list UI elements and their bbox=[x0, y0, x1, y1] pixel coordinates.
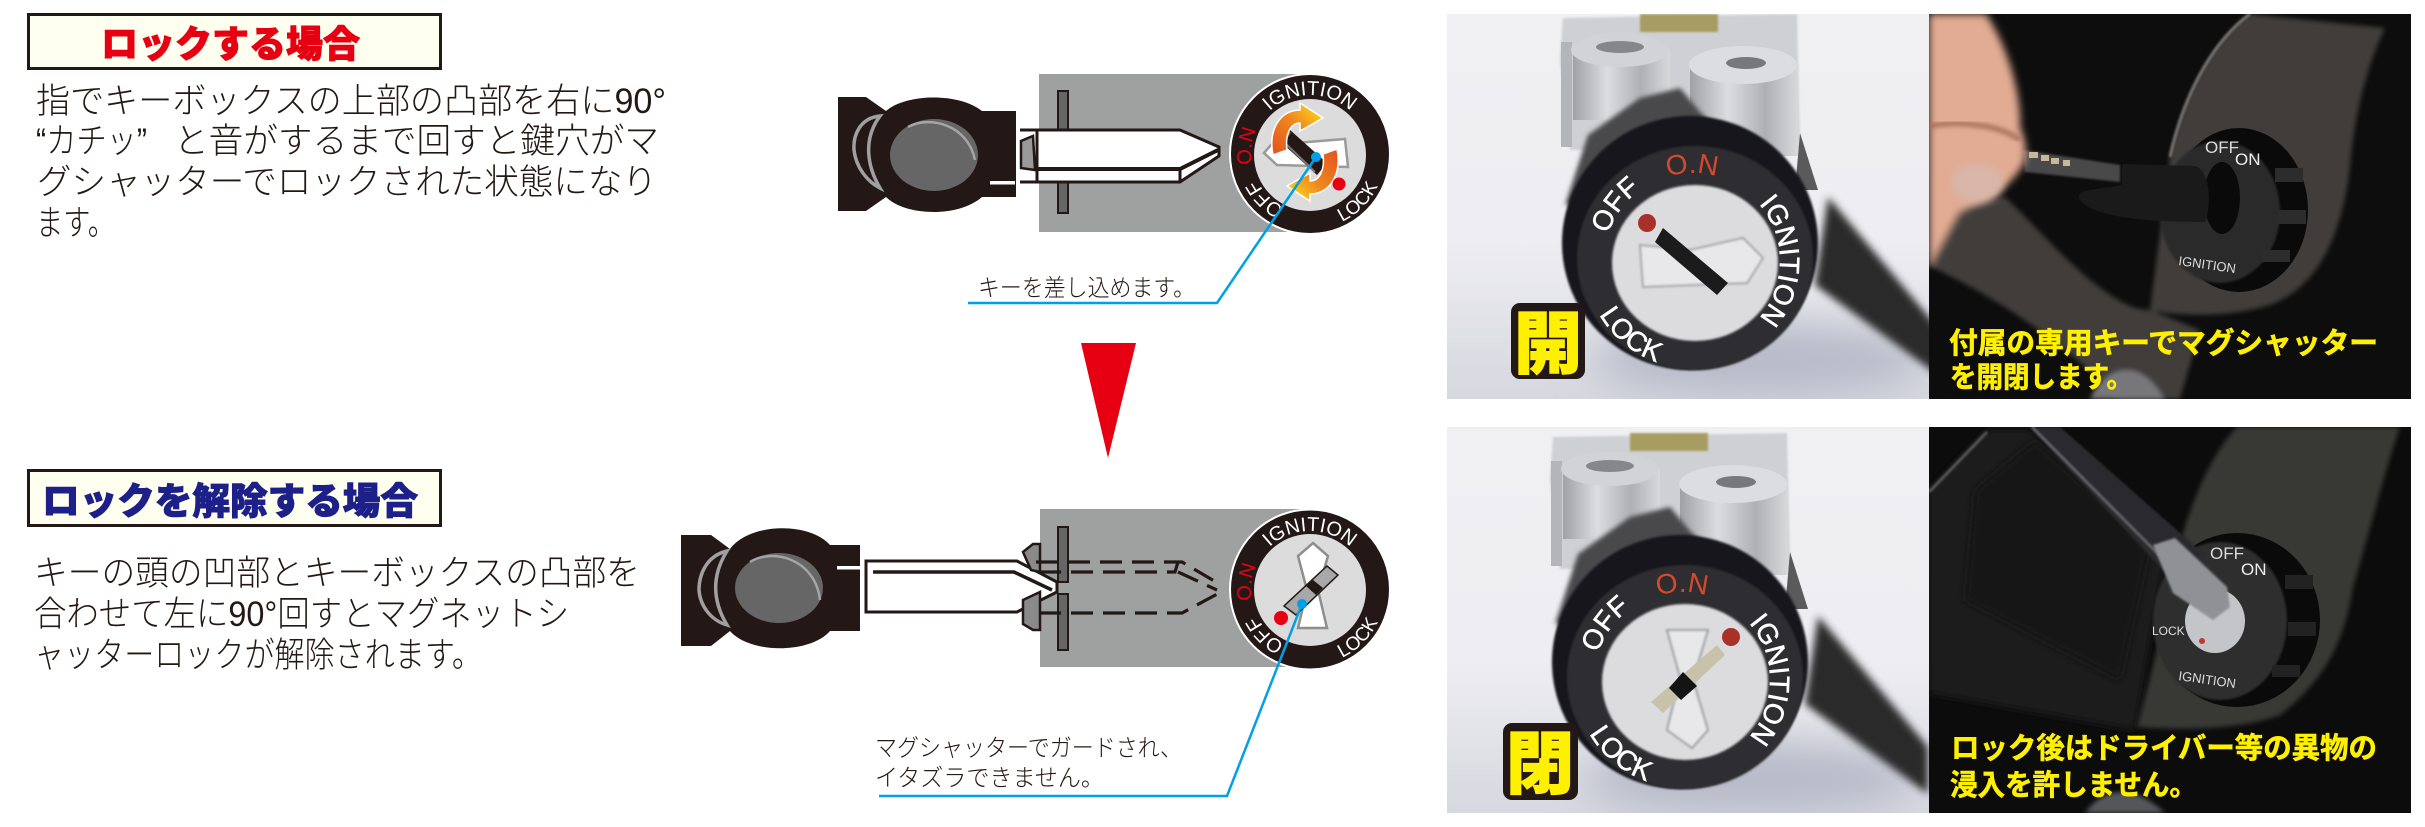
text block: unlock instructions bbox=[34, 554, 640, 675]
text block: lock instructions: と音がするまで回すと鍵穴がマ bbox=[174, 122, 659, 161]
ignition ring: IGNITION bbox=[2178, 253, 2237, 276]
callout text: マグシャッターでガードされ、 bbox=[875, 735, 1182, 762]
callout text: イタズラできません。 bbox=[875, 765, 1104, 792]
left dashboard band bbox=[1929, 430, 2165, 730]
heading: unlock case: ロックを解除する場合 bbox=[42, 481, 418, 522]
text block: unlock instructions: ャッターロックが解除されます。 bbox=[34, 636, 482, 675]
callout line: insert key bbox=[968, 157, 1316, 303]
icon: ignition dial, locked: O.N bbox=[1237, 562, 1256, 600]
icon: key head bbox=[681, 528, 860, 648]
icon: ignition dial, locking: IGNITION bbox=[1262, 81, 1358, 110]
icon: ignition dial, locking: LOCK bbox=[1337, 180, 1378, 222]
keyhole bbox=[1667, 630, 1708, 748]
ignition ring bbox=[2160, 128, 2308, 292]
text block: unlock instructions: 合わせて左に90°回すとマグネットシ bbox=[34, 595, 569, 634]
ring labels: OFF bbox=[1582, 594, 1624, 650]
icon: ignition dial, locking: OFF bbox=[1245, 183, 1281, 216]
text block: lock instructions: “カチッ” bbox=[36, 122, 147, 161]
ring labels: O.N bbox=[1656, 572, 1708, 594]
icon: ignition dial, locked: LOCK bbox=[1337, 616, 1378, 658]
ignition ring: OFF bbox=[2205, 138, 2239, 157]
photo: key in dashboard bbox=[1929, 14, 2411, 399]
icon: ignition dial, locking bbox=[1229, 74, 1389, 233]
callout dot bbox=[1311, 152, 1321, 162]
badge: open: 開 bbox=[1514, 307, 1582, 383]
heading: unlock case bbox=[28, 470, 440, 526]
shutter plates bbox=[1058, 527, 1068, 650]
icon: key head bbox=[838, 97, 1016, 212]
text block: lock instructions bbox=[36, 82, 666, 243]
callout text: キーを差し込めます。 bbox=[978, 275, 1195, 302]
ring labels: LOCK bbox=[1590, 724, 1654, 782]
red dot bbox=[1722, 628, 1740, 646]
ring labels: LOCK bbox=[1600, 305, 1664, 363]
ring labels: OFF bbox=[1592, 175, 1634, 230]
photo: open lock closeup bbox=[1447, 14, 1929, 399]
dashboard panel bbox=[1929, 14, 2385, 399]
finger bbox=[1929, 14, 2026, 265]
panel: lock body bbox=[1040, 509, 1315, 667]
key bbox=[2023, 150, 2209, 222]
icon: ignition dial, locking: O.N bbox=[1237, 126, 1256, 164]
photo: screwdriver on locked shutter bbox=[1929, 427, 2411, 813]
ring labels bbox=[1582, 572, 1790, 782]
ignition ring: ON bbox=[2241, 560, 2266, 579]
icon: ignition dial, locked bbox=[1229, 509, 1389, 668]
metal glare bbox=[2090, 370, 2165, 399]
callout text bbox=[875, 735, 1182, 792]
text block: lock instructions: ます。 bbox=[36, 204, 115, 243]
left recess bbox=[1965, 440, 2150, 680]
screwdriver bbox=[2030, 427, 2230, 620]
key slot bbox=[1651, 645, 1725, 713]
ignition ring: LOCK bbox=[2152, 624, 2185, 638]
ignition ring: OFF bbox=[2210, 544, 2244, 563]
shutter plate bbox=[1058, 91, 1068, 213]
panel: lock body bbox=[1039, 74, 1314, 232]
icon: ignition dial, locked: IGNITION bbox=[1262, 517, 1358, 546]
heading: lock case: ロックする場合 bbox=[101, 24, 360, 65]
icon: key blade bbox=[1020, 130, 1219, 182]
diagram: key being inserted bbox=[838, 74, 1389, 304]
ring labels bbox=[1592, 154, 1800, 363]
ring labels: IGNITION bbox=[1760, 194, 1800, 328]
key slot bbox=[1655, 228, 1728, 295]
text block: lock instructions: 指でキーボックスの上部の凸部を右に90° bbox=[36, 82, 666, 121]
ring labels: O.N bbox=[1666, 154, 1718, 176]
ignition ring: ON bbox=[2235, 150, 2260, 169]
caption bbox=[1949, 327, 2378, 394]
keyhole bbox=[1640, 238, 1763, 287]
callout dot bbox=[1297, 599, 1307, 609]
ring labels: IGNITION bbox=[1750, 612, 1790, 747]
photo: closed lock closeup bbox=[1447, 427, 1929, 813]
badge: closed: 閉 bbox=[1506, 727, 1574, 803]
heading: lock case bbox=[28, 14, 440, 68]
caption: ロック後はドライバー等の異物の bbox=[1951, 732, 2377, 765]
text block: lock instructions: グシャッターでロックされた状態になり bbox=[37, 163, 657, 202]
ignition ring: IGNITION bbox=[2178, 668, 2237, 691]
callout line: shutter guard bbox=[879, 604, 1302, 796]
text block: unlock instructions: キーの頭の凹部とキーボックスの凸部を bbox=[34, 554, 640, 593]
caption: 付属の専用キーでマグシャッター bbox=[1949, 327, 2378, 360]
arrow: down bbox=[1081, 343, 1136, 458]
ignition ring bbox=[2152, 533, 2320, 707]
dashboard panel bbox=[2137, 427, 2400, 729]
caption: を開閉します。 bbox=[1950, 362, 2133, 394]
icon: ignition dial, locked: OFF bbox=[1245, 619, 1282, 652]
hidden key outline bbox=[1036, 562, 1221, 613]
caption: 浸入を許しません。 bbox=[1950, 769, 2197, 802]
diagram: key blocked by shutter bbox=[681, 509, 1389, 798]
caption bbox=[1950, 732, 2377, 802]
red dot bbox=[1638, 214, 1656, 232]
icon: key blade with shutter collar bbox=[866, 544, 1057, 630]
metal glare bbox=[2085, 792, 2165, 813]
